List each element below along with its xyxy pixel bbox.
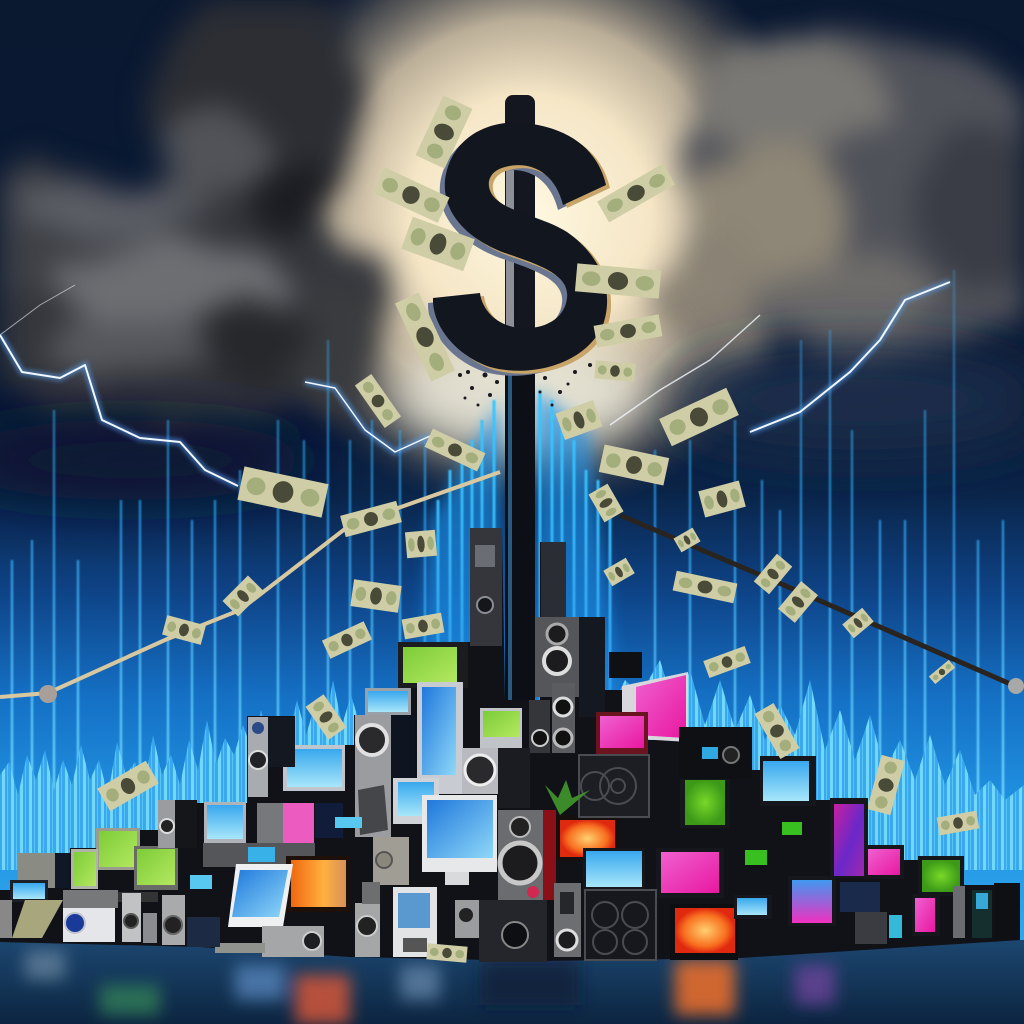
large silver speaker [355,715,415,837]
silver speaker lower [554,883,581,957]
white printer device [393,887,437,957]
falling trend line [620,515,1024,694]
speaker left small [158,800,197,848]
large blue monitor [422,795,497,885]
falling banknotes [97,95,979,835]
green right [918,856,964,896]
blue monitor left [204,802,246,844]
centre low speakers [355,837,547,962]
central bright spike cluster [420,390,620,720]
blue laptop centre [393,778,439,824]
central glow [230,0,830,515]
left mid speakers [122,893,220,947]
dark right low cabinets [840,882,887,944]
rising trend line [0,472,500,703]
speaker tower left of pole [470,528,502,646]
patterned speaker lower [585,890,656,960]
small magenta right [912,894,940,936]
white laptop large [228,864,293,927]
floor reflections [25,950,835,1024]
tiny green right [782,822,802,835]
pink monitor upper right [622,672,688,742]
orange monitor left [286,856,350,912]
hot screen bottom [670,904,738,960]
lightning glow [0,282,950,486]
blue monitor right [760,756,816,806]
small laptop far left [10,880,48,902]
black device above pink monitor [609,652,642,678]
speaker left [248,717,295,797]
patterned speaker panel [579,755,649,817]
lightning bolts [0,282,950,486]
tall blue monitor [417,682,463,794]
lime square screen [680,776,730,828]
dollar sign [428,123,611,376]
gray box far left [18,853,69,888]
note and projector left row [0,900,115,942]
blue frequency spikes [12,270,1003,860]
magenta small [864,845,904,879]
pole [505,95,535,720]
banknotes in front of devices [306,694,800,759]
gradient monitor lower right [788,876,836,926]
orange monitor centre [556,815,620,861]
floor [0,940,1024,1024]
gray shelf left [203,843,315,867]
green monitor top [398,642,468,688]
small banknote on floor [426,943,468,963]
small blue screen top [365,688,411,716]
blue laptop centre right [583,848,645,892]
plant [545,780,590,815]
pink screen left [257,803,343,843]
small green laptop [480,708,522,748]
dark lower sky haze [0,350,1024,500]
small blue right [734,895,772,919]
left storm cloud [0,0,385,425]
monitors and speakers [0,642,1020,963]
disintegrating particles [448,363,592,406]
tiny green middle [745,850,767,865]
silver speaker centre [462,748,530,808]
lit haze behind pole [395,340,645,450]
speaker tower right of pole [529,542,605,753]
dark backing pile of electronics [0,528,1020,961]
small teal right [889,915,902,938]
flat device base [215,926,324,957]
right storm cloud [665,30,1024,370]
green screens left [71,828,178,890]
right end speakers [953,883,1020,940]
big speaker right of monitor [498,810,556,900]
pink small [596,712,648,754]
pink monitor centre right [656,848,724,898]
dark cluster with small blue screen [679,727,752,779]
gray devices row [63,890,158,908]
dense equalizer skyline [0,660,1024,870]
violet tall monitor [830,798,868,878]
small cyan screens [190,817,362,889]
blue monitor mid left [283,745,345,791]
